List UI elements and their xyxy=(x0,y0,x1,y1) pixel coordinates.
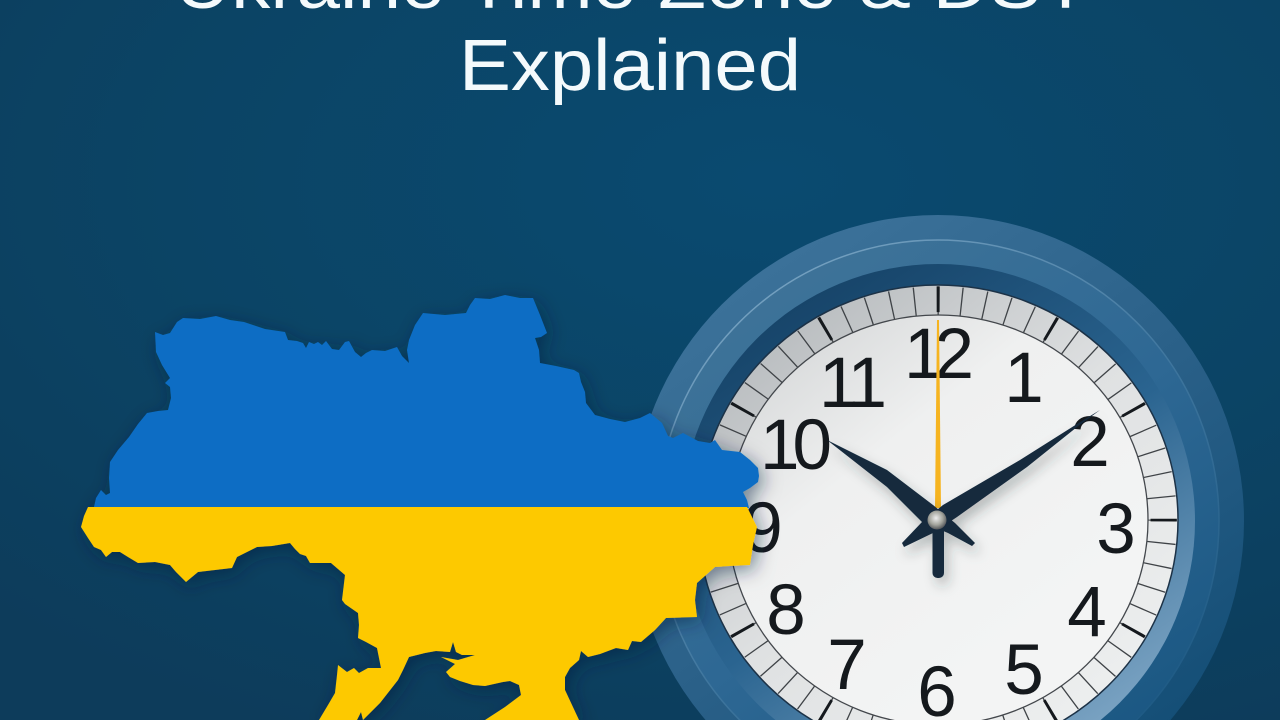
clock numerals: 8 xyxy=(766,571,806,650)
lower hand xyxy=(932,522,944,578)
wall clock xyxy=(632,215,1244,720)
clock numerals: 10 xyxy=(760,406,832,485)
centre hub xyxy=(928,510,946,530)
yellow lower half of map xyxy=(81,507,757,720)
clock middle ring xyxy=(657,240,1219,720)
clock numerals: 1 xyxy=(1004,339,1044,418)
minute and hour ticks xyxy=(712,299,1164,720)
clock outer ring xyxy=(632,215,1244,720)
hour hand pointing to 10 xyxy=(827,440,975,546)
clock numerals: 2 xyxy=(1070,403,1110,482)
map of Ukraine in flag colours xyxy=(81,295,759,720)
minute hand pointing to 2 xyxy=(902,410,1100,547)
clock numerals: 3 xyxy=(1096,490,1136,569)
clock numerals: 9 xyxy=(743,489,783,568)
clock face tick band xyxy=(698,285,1178,720)
clock hands xyxy=(827,410,1100,578)
blue upper half of map xyxy=(88,295,759,508)
clock numerals: 5 xyxy=(1004,631,1044,710)
clock numerals: 7 xyxy=(827,626,867,705)
clock numerals: 11 xyxy=(819,344,887,423)
clock numerals: 12 xyxy=(904,315,974,394)
clock face centre xyxy=(728,315,1148,720)
title xyxy=(174,0,1090,106)
clock numerals: 4 xyxy=(1067,573,1107,652)
clock inner rim xyxy=(681,264,1195,720)
second hand xyxy=(935,320,941,508)
clock numerals xyxy=(743,315,1136,720)
title: Explained xyxy=(459,26,801,106)
